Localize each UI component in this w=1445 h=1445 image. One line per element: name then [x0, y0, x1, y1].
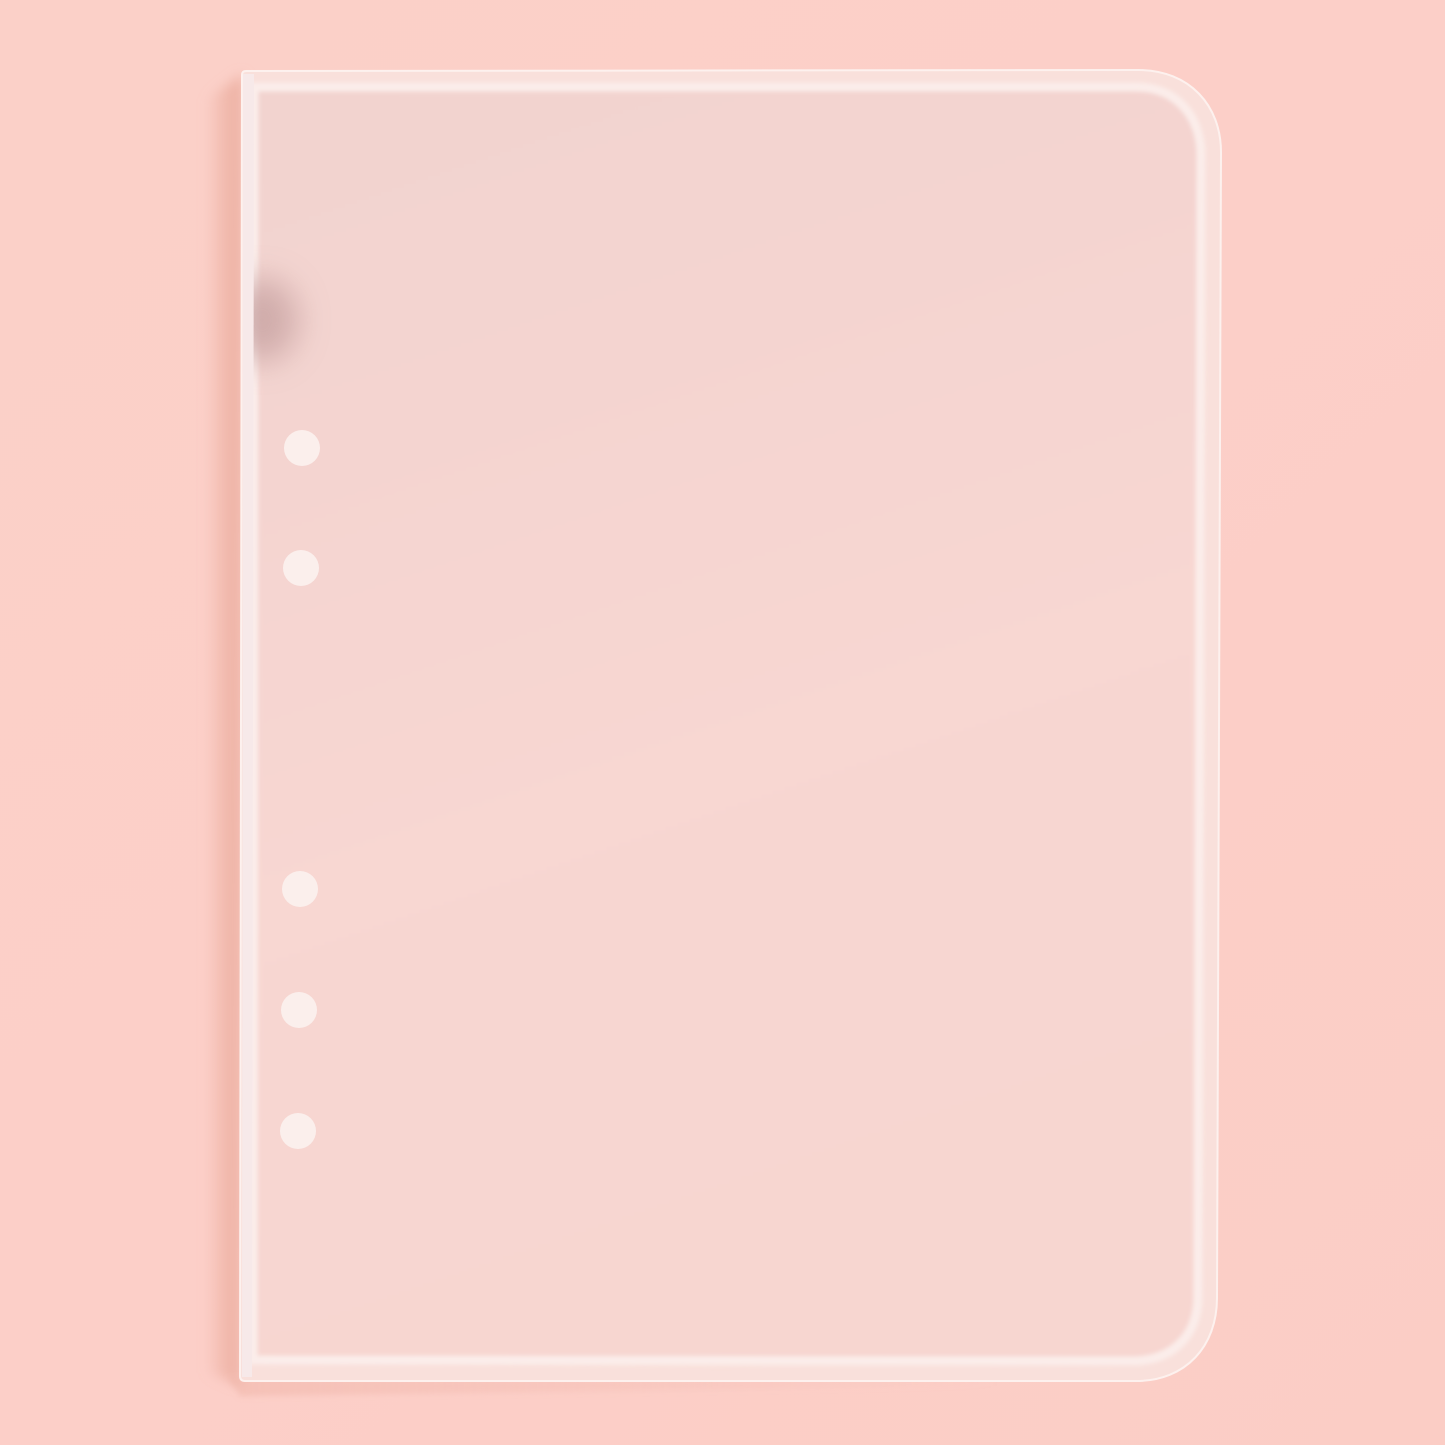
inner frosted panel with soft ridge — [253, 87, 1201, 1361]
cover outer rim — [240, 70, 1221, 1381]
binder hole 1 — [284, 430, 320, 466]
shadow smudge seen through frosted sheet — [226, 278, 298, 362]
binder hole 2 — [283, 550, 319, 586]
left binding strip — [242, 74, 254, 1377]
cast shadow left of cover — [206, 74, 1000, 1396]
binder hole 3 — [282, 871, 318, 907]
cover edge highlight — [240, 70, 1221, 1381]
binder hole 5 — [280, 1113, 316, 1149]
product photo: frosted binder cover on pink background — [211, 69, 1222, 1396]
cover sheet — [226, 70, 1221, 1381]
binder hole 4 — [281, 992, 317, 1028]
